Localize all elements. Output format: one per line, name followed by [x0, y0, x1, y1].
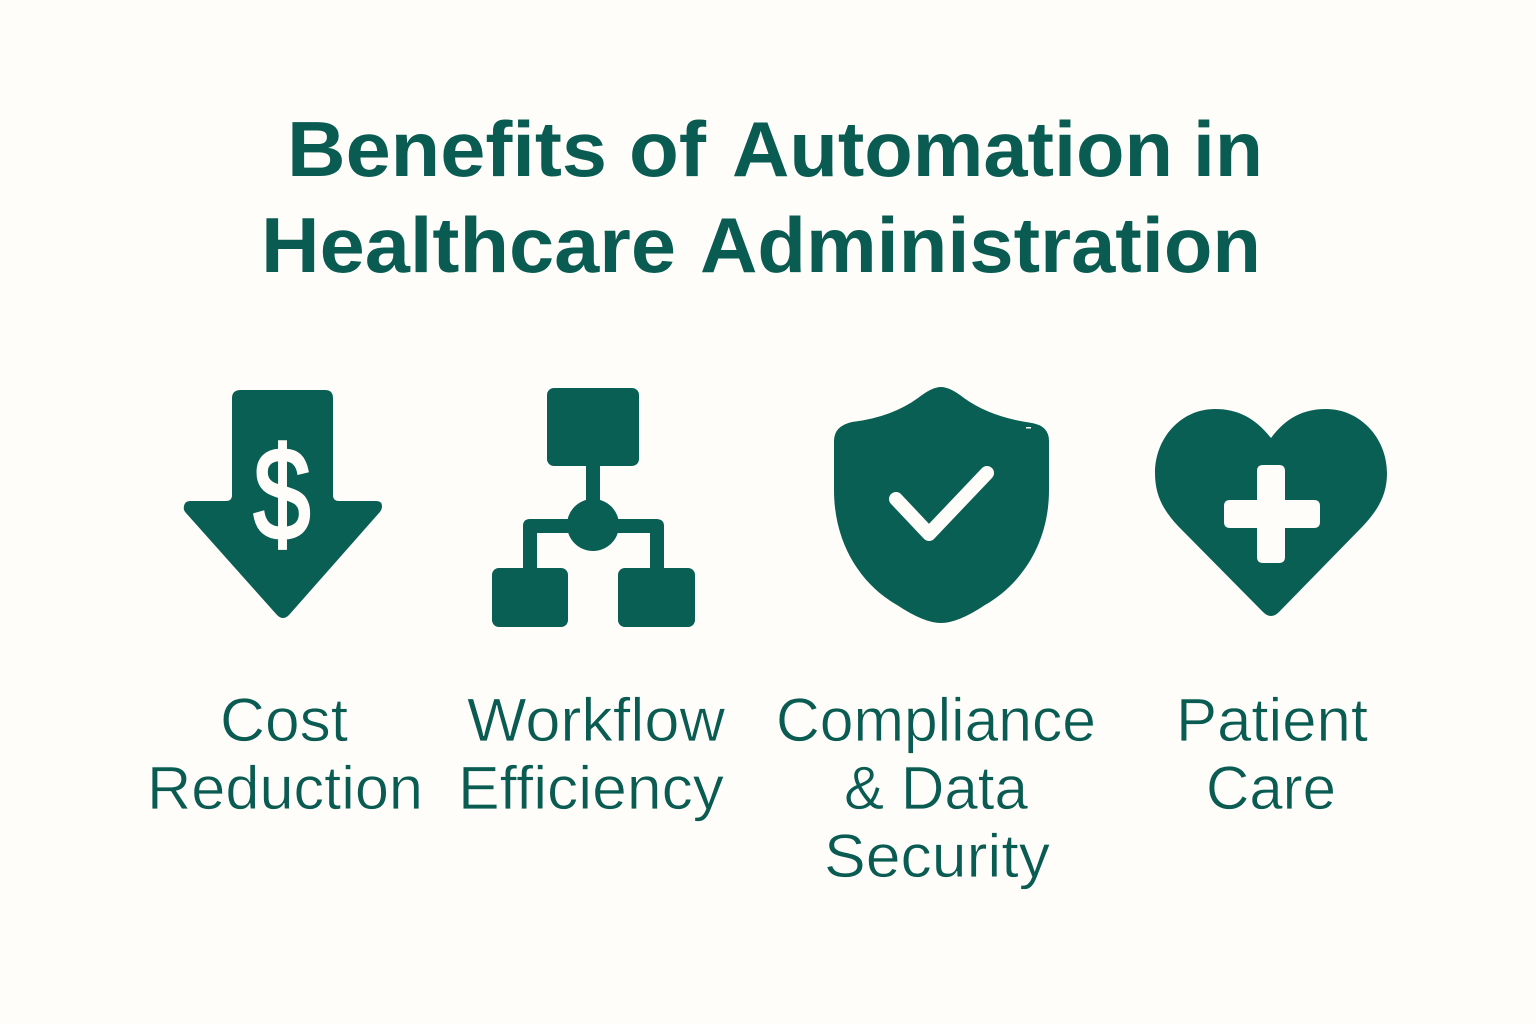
title: of	[629, 105, 707, 193]
label: workflow efficiency: Workflow	[467, 686, 726, 754]
label: compliance and data security	[776, 686, 1096, 890]
title: Automation	[732, 105, 1173, 193]
label: cost reduction: Cost	[220, 686, 348, 754]
title: in	[1193, 105, 1263, 193]
icon: cost reduction arrow with dollar sign: $	[254, 421, 310, 567]
label: patient care	[1176, 686, 1368, 822]
label: compliance and data security: & Data	[844, 754, 1028, 822]
label: compliance and data security: Compliance	[776, 686, 1096, 754]
title: Healthcare	[261, 201, 676, 289]
label: workflow efficiency: Efficiency	[458, 754, 725, 822]
label: cost reduction	[147, 686, 423, 822]
icon: shield with check mark	[834, 387, 1049, 623]
label: patient care: Patient	[1176, 686, 1368, 754]
label: workflow efficiency	[458, 686, 726, 822]
label: cost reduction: Reduction	[147, 754, 423, 822]
icon: cost reduction arrow with dollar sign	[184, 390, 382, 618]
title	[261, 105, 1263, 289]
title: Administration	[700, 201, 1261, 289]
label: compliance and data security: Security	[824, 822, 1051, 890]
title: Benefits	[287, 105, 607, 193]
icon: heart with medical cross	[1155, 409, 1387, 616]
label: patient care: Care	[1206, 754, 1336, 822]
icon: workflow hierarchy	[492, 388, 695, 627]
